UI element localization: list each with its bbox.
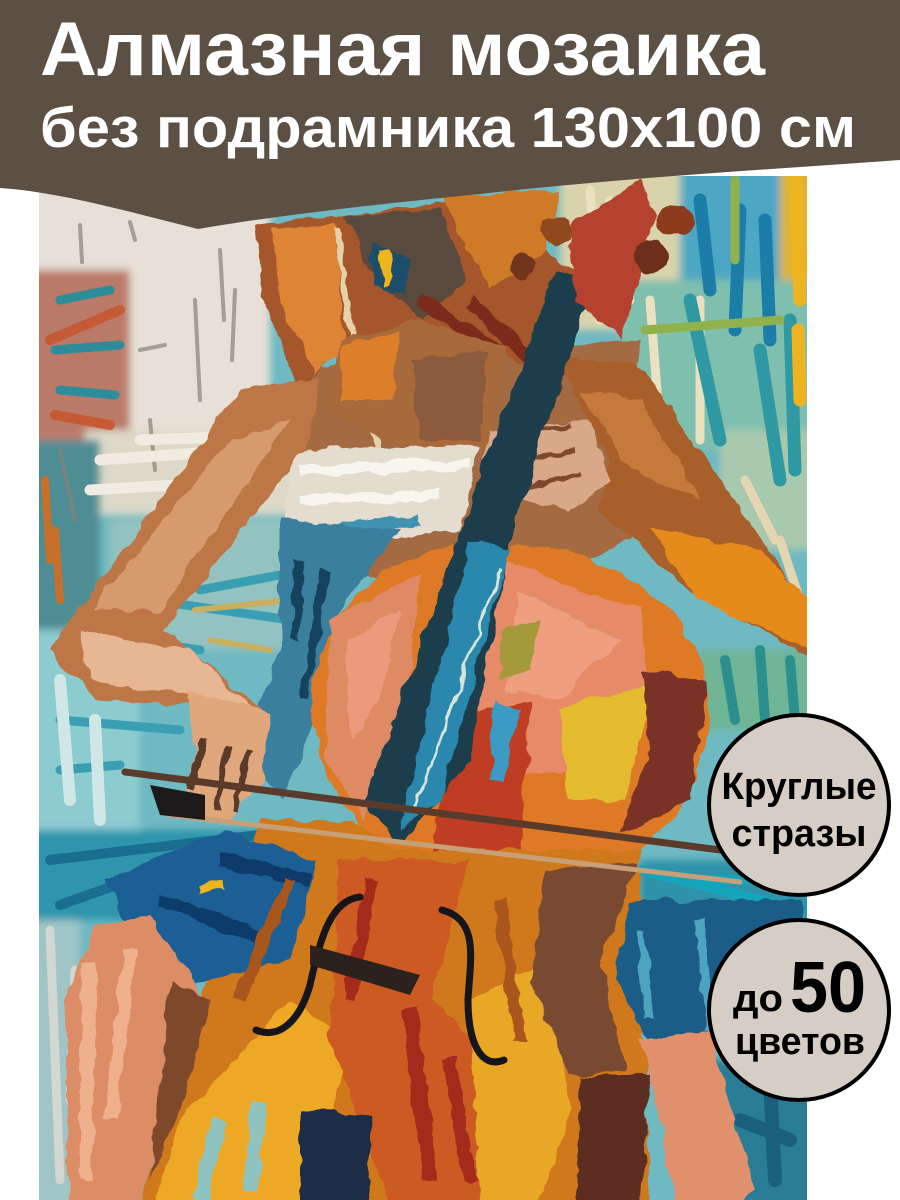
cello lower body bbox=[150, 860, 570, 1200]
title line 2: без подрамника 130х100 см bbox=[40, 96, 856, 160]
lower right blue drape bbox=[615, 900, 830, 1060]
banner shape bbox=[0, 0, 900, 229]
badge: up to 50 colours bbox=[709, 920, 889, 1100]
chest bbox=[325, 320, 505, 450]
right hand lower bbox=[640, 1030, 755, 1200]
title line 1: Алмазная мозаика bbox=[40, 7, 766, 92]
cello upper body bbox=[312, 545, 708, 850]
blue dress bbox=[240, 520, 400, 800]
figure and cello brush shapes bbox=[50, 180, 830, 1200]
badge: up to 50 colours: цветов bbox=[735, 1021, 865, 1063]
badge: round rhinestones: стразы bbox=[732, 813, 866, 855]
scroll and pegs bbox=[510, 180, 693, 340]
cello lower right rim bbox=[530, 860, 640, 1075]
painting background bbox=[20, 160, 820, 1200]
background brush dabs bbox=[45, 180, 800, 1180]
bow bbox=[125, 772, 740, 882]
torso underlay bbox=[305, 340, 641, 579]
right arm bbox=[564, 357, 807, 656]
badge: round rhinestones: Круглые bbox=[722, 766, 876, 808]
f-holes bbox=[256, 897, 504, 1062]
bridge bbox=[310, 945, 420, 995]
blue skirt bbox=[105, 830, 318, 985]
painting: cellist bbox=[20, 160, 830, 1200]
fingerboard and neck bbox=[365, 270, 595, 845]
dark lower right bbox=[575, 1075, 650, 1200]
badge: up to 50 colours: 50 bbox=[790, 948, 866, 1028]
hair and head bbox=[255, 190, 574, 449]
badge: up to 50 colours: до bbox=[733, 978, 783, 1020]
background colour fields bbox=[20, 160, 820, 1200]
left arm bbox=[50, 375, 320, 825]
header banner bbox=[0, 0, 900, 229]
knee bbox=[65, 915, 210, 1200]
badge: round rhinestones bbox=[709, 715, 889, 895]
hand on neck bbox=[485, 420, 610, 510]
cello lower underlay bbox=[130, 820, 650, 1200]
white dress top bbox=[285, 445, 480, 545]
